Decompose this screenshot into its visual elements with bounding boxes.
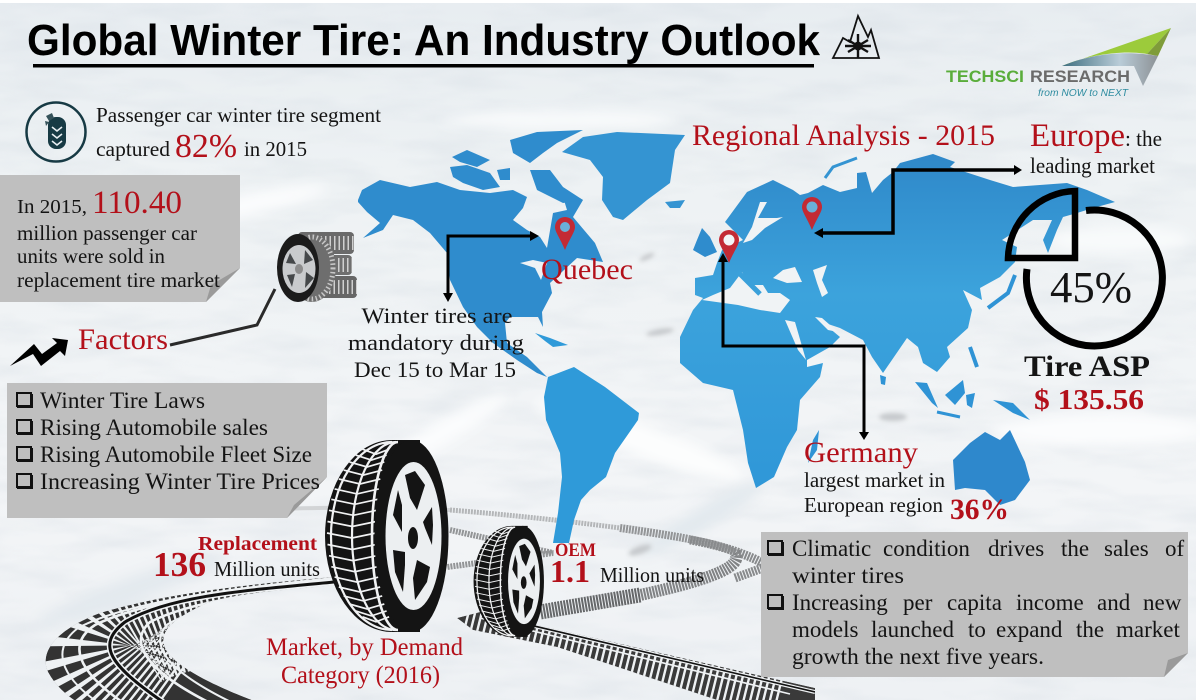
driver: climatic condition: sales	[1104, 536, 1149, 561]
panel: replacement units: 110.40	[92, 185, 182, 221]
label: Quebec: Quebec	[541, 253, 633, 286]
text: Germany: 36%	[950, 494, 1009, 526]
text: Europe: leading market	[1030, 153, 1155, 178]
map: Australia	[953, 430, 1030, 505]
label: replacement	[153, 533, 320, 584]
track: left curve	[46, 576, 345, 700]
world map	[358, 130, 1115, 543]
heading: factors	[10, 323, 168, 366]
driver: income and new models: launched	[871, 617, 955, 642]
driver: income and new models: the	[1076, 617, 1104, 642]
panel: replacement units	[0, 175, 240, 302]
label: replacement: 136	[153, 545, 206, 584]
text: mandatory winter tires: Dec 15 to Mar 15	[354, 357, 516, 382]
driver: income and new models: new	[1143, 590, 1182, 615]
arrow: Europe	[814, 165, 1022, 238]
driver: income and new models	[768, 590, 1182, 669]
panel: replacement units: units were sold in	[17, 244, 165, 268]
map: Philippines	[970, 347, 977, 367]
track: lower right	[457, 612, 815, 700]
icon: winter tire stack	[277, 232, 357, 302]
driver: income and new models: Increasing	[792, 590, 888, 615]
driver: income and new models: market	[1116, 617, 1180, 642]
tire tracks	[46, 508, 815, 700]
map: Japan	[988, 275, 1015, 308]
icon: winter tire badge	[26, 102, 86, 162]
chart: Europe 45 percent: 45%	[1050, 263, 1132, 312]
map: Caribbean islands	[535, 333, 568, 347]
arrow: Quebec	[443, 231, 539, 302]
callout: passenger car segment: Passenger car winter tire segment	[96, 103, 381, 127]
label: replacement: Replacement	[198, 533, 317, 555]
pin: Germany	[719, 230, 739, 263]
list item: Winter Tire Laws	[40, 388, 205, 413]
map: Mediterranean and inland seas	[702, 202, 838, 360]
icon: zigzag arrow	[10, 338, 68, 366]
track: behind tires	[447, 530, 553, 567]
pin: Quebec	[555, 217, 575, 250]
text: tire ASP	[1024, 350, 1150, 416]
label: replacement: Million units	[214, 557, 320, 581]
map: Eurasia and Africa	[680, 154, 1115, 488]
driver: climatic condition: winter tires	[792, 563, 904, 588]
panel: market drivers	[761, 532, 1188, 677]
heading: market by demand: Market, by Demand	[266, 634, 463, 661]
callout: passenger car segment: 82%	[175, 128, 237, 165]
label: OEM: Million units	[600, 563, 704, 587]
map: Italy	[738, 272, 760, 294]
panel: replacement units: In 2015,	[17, 196, 87, 218]
map: North America	[358, 180, 603, 377]
list item: Increasing Winter Tire Prices	[40, 469, 320, 494]
driver: climatic condition: Climatic	[792, 536, 871, 561]
text: Germany: European region	[804, 493, 943, 517]
callout: passenger car segment	[26, 102, 381, 165]
track: far curve	[262, 508, 768, 612]
map: Britain	[693, 228, 717, 257]
driver: climatic condition: drives	[988, 536, 1044, 561]
driver: income and new models: models	[792, 617, 858, 642]
text: Germany	[804, 436, 1009, 526]
driver: climatic condition	[768, 536, 1184, 588]
list item: Rising Automobile sales	[40, 415, 268, 440]
driver: climatic condition: of	[1165, 536, 1184, 561]
map: Madagascar	[808, 430, 819, 463]
panel: factors list	[7, 383, 327, 518]
driver: income and new models: capita	[947, 590, 1002, 615]
pin: Russia	[802, 197, 822, 230]
callout: passenger car segment: captured	[96, 137, 171, 161]
text: Europe: : the	[1125, 126, 1162, 151]
connector line	[170, 289, 275, 345]
text: Europe: Europe	[1030, 118, 1125, 154]
logo: TechSci Research: from NOW to NEXT	[1038, 87, 1130, 99]
list item: Rising Automobile Fleet Size	[40, 442, 312, 467]
map: Southeast Asia islands	[880, 375, 1030, 420]
panel: replacement units: replacement tire market	[17, 268, 220, 292]
text: mandatory winter tires: Winter tires are	[362, 303, 513, 328]
logo: TechSci Research: RESEARCH	[1030, 67, 1130, 86]
panel: replacement units: million passenger car	[17, 221, 197, 245]
map: Iceland	[665, 200, 685, 208]
driver: climatic condition: the	[1061, 536, 1089, 561]
driver: income and new models: per	[903, 590, 933, 615]
icon: small tire	[474, 526, 544, 637]
driver: income and new models: expand	[996, 617, 1063, 642]
text: tire ASP: Tire ASP	[1024, 350, 1150, 383]
text: Europe	[1030, 118, 1162, 178]
map: Novaya Zemlya	[825, 158, 857, 178]
map: Great Lakes	[520, 260, 547, 280]
map: Java	[937, 412, 960, 417]
title: Global Winter Tire: An Industry Outlook	[27, 16, 821, 65]
driver: climatic condition: condition	[883, 536, 970, 561]
map: Arctic islands	[450, 130, 583, 203]
text: mandatory winter tires	[348, 303, 524, 382]
map: South America	[544, 367, 639, 543]
callout: passenger car segment: in 2015	[244, 137, 307, 161]
map: Greenland	[562, 132, 685, 220]
chart: Europe 45 percent	[1008, 191, 1162, 346]
logo: TechSci Research	[946, 28, 1171, 99]
heading: regional analysis: Regional Analysis - 2015	[692, 119, 995, 152]
label: OEM	[550, 540, 704, 589]
driver: income and new models: and	[1097, 590, 1131, 615]
heading: factors: Factors	[78, 323, 168, 356]
arrow: Germany	[718, 253, 869, 440]
text: tire ASP: $ 135.56	[1034, 385, 1144, 416]
heading: market by demand	[266, 634, 463, 689]
logo: TechSci Research: TECHSCI	[946, 67, 1024, 86]
text: mandatory winter tires: mandatory during	[348, 330, 524, 355]
label: OEM: OEM	[555, 540, 596, 561]
heading: market by demand: Category (2016)	[281, 662, 440, 689]
driver: income and new models: growth the next five years.	[792, 644, 1044, 669]
icon: snow mountain	[833, 16, 879, 58]
text: Germany: Germany	[804, 436, 918, 469]
icon: large tire	[325, 440, 448, 632]
text: Germany: largest market in	[804, 468, 945, 492]
label: OEM: 1.1	[550, 553, 590, 589]
driver: income and new models: income	[1016, 590, 1084, 615]
driver: income and new models: to	[968, 617, 986, 642]
